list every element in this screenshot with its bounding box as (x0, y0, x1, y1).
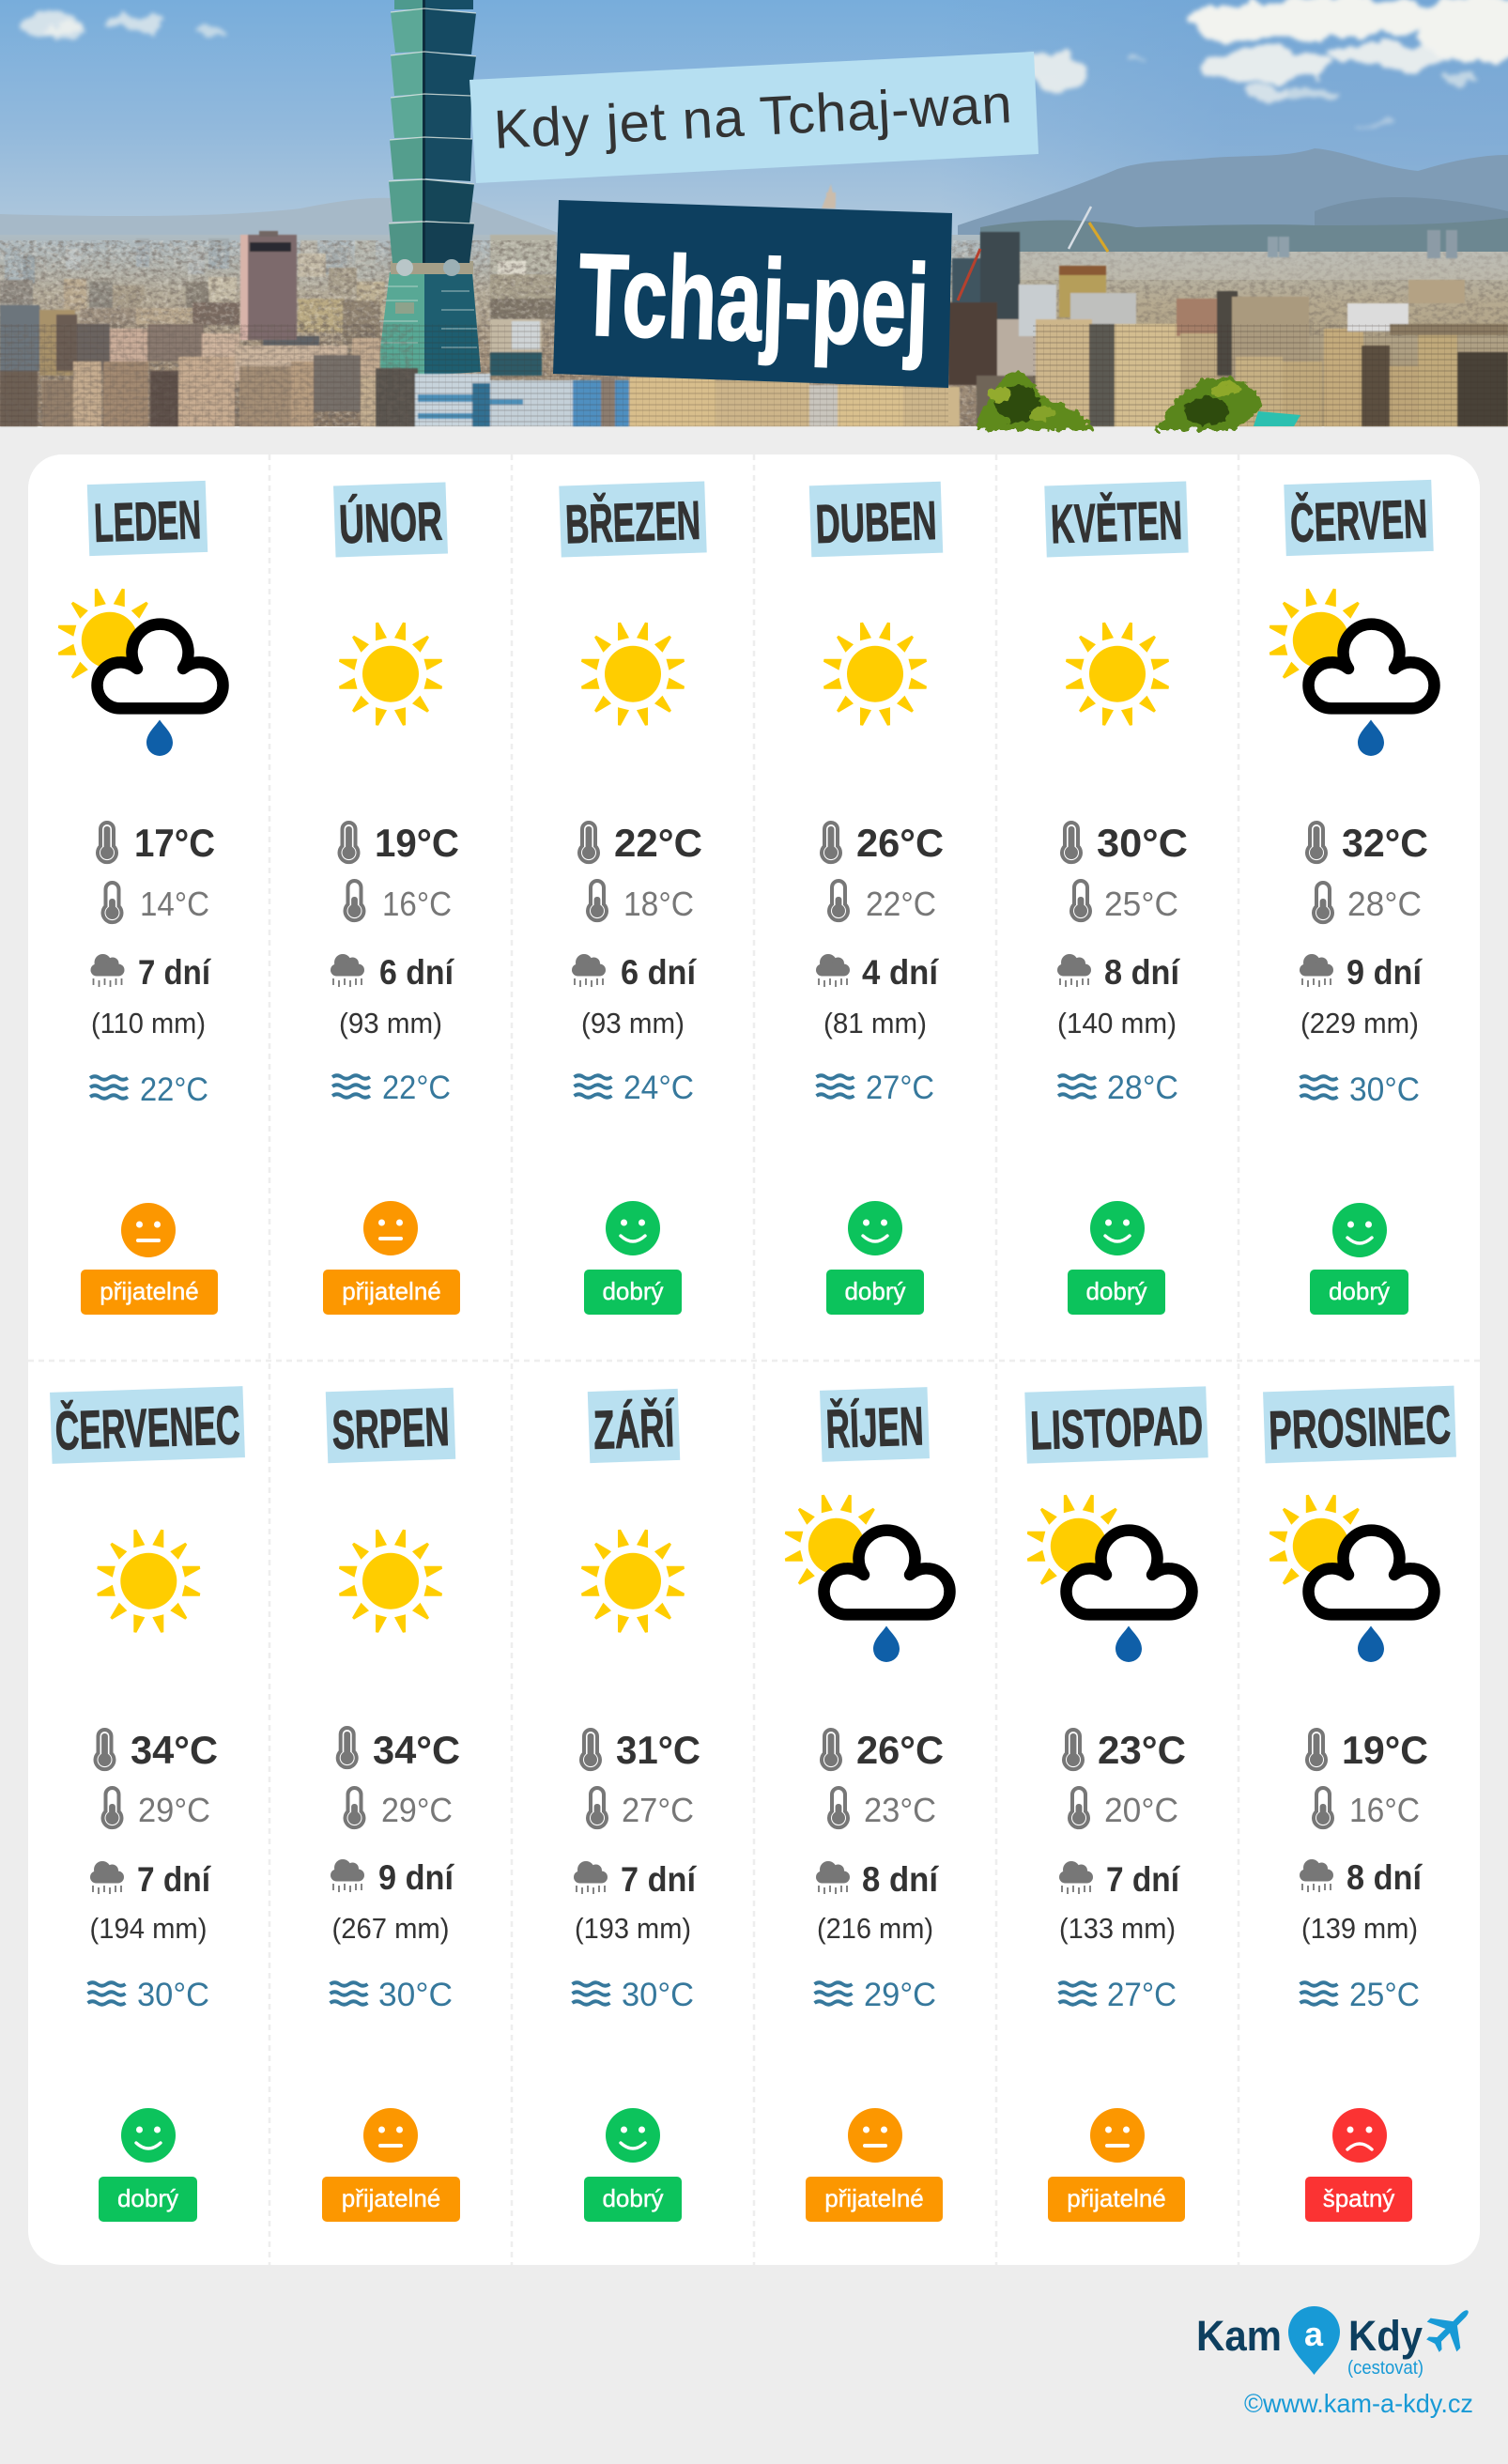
month label (1024, 1386, 1208, 1464)
rainfall: (93 mm) (581, 1007, 685, 1040)
min temperature: 23°C (864, 1791, 936, 1829)
icon: rain (816, 1861, 850, 1894)
panel: duben (809, 482, 944, 1315)
logo: Kam a Kdy (1196, 2296, 1483, 2379)
panel: srpen (322, 1388, 460, 2222)
icon: max temperature (1062, 823, 1081, 862)
icon: rain (90, 954, 124, 987)
icon: min temperature (1314, 883, 1332, 922)
icon: sea (815, 1982, 853, 2005)
icon: rain (90, 1861, 124, 1894)
rainy days: 7 dní (137, 1860, 212, 1899)
month label (588, 1389, 680, 1463)
icon: min temperature (346, 1788, 364, 1827)
white card (28, 454, 1480, 2265)
sea temperature: 30°C (137, 1977, 209, 2013)
icon: rain (816, 954, 850, 987)
subtitle tag (469, 52, 1039, 183)
icon: rating face (1090, 2108, 1145, 2163)
rainfall: (193 mm) (575, 1912, 691, 1945)
icon: min temperature (103, 1788, 122, 1827)
panel: leden (58, 481, 223, 1315)
panel: listopad (1024, 1386, 1208, 2222)
sea temperature: 25°C (1349, 1977, 1420, 2013)
month label (809, 482, 943, 557)
icon: max temperature (340, 823, 359, 862)
icon: max temperature (581, 1730, 600, 1769)
max temperature: 32°C (1342, 821, 1428, 865)
month label: ZÁŘÍ (592, 1397, 676, 1461)
max temperature: 19°C (375, 821, 459, 865)
weather icon: sun (97, 1530, 200, 1633)
max temperature: 19°C (1342, 1728, 1428, 1772)
rainy days: 8 dní (862, 1860, 940, 1899)
icon: max temperature (1307, 1730, 1326, 1769)
rating badge: přijatelné (342, 2184, 440, 2212)
rating badge (323, 1270, 460, 1315)
weather icon: sun and rain (58, 589, 223, 756)
rainy days: 9 dní (1346, 953, 1423, 992)
rainy days: 8 dní (1104, 953, 1181, 992)
rating badge: přijatelné (824, 2184, 924, 2212)
sea temperature: 22°C (140, 1071, 208, 1108)
sea temperature: 30°C (378, 1977, 453, 2013)
panel: květen (1044, 482, 1189, 1315)
icon: rain (1300, 1859, 1333, 1892)
icon: sea (1059, 1982, 1097, 2005)
rating badge: dobrý (1085, 1277, 1147, 1305)
subtitle tag: Kdy jet na Tchaj-wan (492, 73, 1013, 161)
rating badge (1068, 1270, 1165, 1315)
max temperature: 17°C (134, 821, 215, 865)
rainfall: (229 mm) (1300, 1007, 1419, 1040)
rating badge (81, 1270, 218, 1315)
icon: rating face (1090, 1201, 1145, 1255)
month label: LEDEN (93, 489, 202, 554)
sub-element: city texture (0, 240, 980, 426)
icon: min temperature (1069, 1788, 1088, 1827)
icon: sea (1300, 1076, 1337, 1099)
icon: sea (331, 1982, 368, 2005)
panel: říjen (785, 1387, 950, 2222)
min temperature: 16°C (382, 885, 452, 923)
icon: max temperature (579, 823, 598, 862)
weather icon: sun (581, 1530, 685, 1633)
min temperature: 20°C (1104, 1791, 1178, 1829)
rating badge: dobrý (844, 1277, 906, 1305)
sea temperature: 30°C (1349, 1071, 1420, 1108)
weather icon: sun (1066, 623, 1169, 726)
month label: ÚNOR (338, 491, 443, 555)
icon: airplane (1418, 2296, 1483, 2361)
min temperature: 29°C (138, 1791, 210, 1829)
icon: max temperature (98, 823, 116, 862)
panel: prosinec (1263, 1386, 1456, 2222)
weather icon: sun and rain (785, 1495, 950, 1662)
rating badge: přijatelné (1067, 2184, 1166, 2212)
icon: rating face (1332, 2108, 1387, 2163)
weather icon: sun and rain (1027, 1495, 1193, 1662)
month label (326, 1388, 455, 1463)
month label (50, 1386, 245, 1464)
sea temperature: 24°C (623, 1070, 694, 1106)
icon: min temperature (346, 881, 364, 920)
copyright website: ©www.kam-a-kdy.cz (1244, 2389, 1473, 2418)
panel: červen (1269, 480, 1435, 1315)
rating badge (806, 2177, 943, 2222)
sea temperature: 27°C (1107, 1977, 1177, 2013)
icon: min temperature (1071, 881, 1090, 920)
rating badge (99, 2177, 197, 2222)
rainy days: 7 dní (1106, 1860, 1181, 1899)
min temperature: 28°C (1347, 885, 1422, 923)
rainy days: 9 dní (378, 1858, 455, 1897)
month label (1284, 480, 1434, 556)
rainy days: 7 dní (621, 1860, 698, 1899)
month label: BŘEZEN (564, 490, 701, 555)
icon: rain (574, 1861, 608, 1894)
rainfall: (267 mm) (332, 1912, 449, 1945)
icon: rain (1059, 1861, 1093, 1894)
min temperature: 25°C (1104, 885, 1178, 923)
max temperature: 30°C (1097, 821, 1188, 865)
icon: rating face (121, 1203, 176, 1257)
icon: min temperature (829, 881, 848, 920)
icon: rating face (606, 1201, 660, 1255)
rating badge: dobrý (1329, 1277, 1390, 1305)
rating badge (826, 1270, 924, 1315)
icon: min temperature (588, 1788, 607, 1827)
icon: rating face (121, 2108, 176, 2163)
month label: LISTOPAD (1029, 1394, 1204, 1462)
min temperature: 14°C (140, 885, 209, 923)
rainfall: (216 mm) (817, 1912, 933, 1945)
month label: DUBEN (815, 490, 938, 555)
rating badge: špatný (1323, 2184, 1394, 2212)
month label: KVĚTEN (1050, 490, 1183, 555)
weather icon: sun (339, 623, 442, 726)
weather icon: sun (823, 623, 927, 726)
max temperature: 34°C (131, 1728, 218, 1772)
month label: ČERVENEC (54, 1394, 241, 1462)
rating badge (584, 1270, 682, 1315)
title tag (553, 200, 952, 388)
min temperature: 27°C (622, 1791, 694, 1829)
icon: min temperature (103, 883, 122, 922)
panel: září (573, 1389, 700, 2222)
icon: max temperature (1064, 1730, 1083, 1769)
icon: sea (817, 1075, 854, 1098)
rainfall: (139 mm) (1301, 1912, 1418, 1945)
sea temperature: 27°C (866, 1070, 934, 1106)
icon: rating face (363, 1201, 418, 1255)
sea temperature: 28°C (1107, 1070, 1178, 1106)
sub-element: Taipei 101 tower (377, 0, 481, 376)
sea temperature: 22°C (382, 1070, 451, 1106)
sub-element: distant buildings (0, 235, 556, 343)
panel: červenec (50, 1386, 245, 2222)
sea temperature: 30°C (622, 1977, 694, 2013)
icon: max temperature (822, 823, 840, 862)
month label (820, 1387, 930, 1462)
sub-element: foreground buildings (0, 184, 1508, 426)
rating badge (1305, 2177, 1412, 2222)
min temperature: 16°C (1349, 1791, 1420, 1829)
weather icon: sun (339, 1530, 442, 1633)
month label: SRPEN (331, 1396, 451, 1461)
rainy days: 8 dní (1346, 1858, 1423, 1897)
month label (87, 481, 208, 556)
logo: Kam a Kdy: Kam (1196, 2312, 1282, 2360)
rainfall: (140 mm) (1057, 1007, 1177, 1040)
rainfall: (81 mm) (823, 1007, 927, 1040)
icon: rain (331, 954, 364, 987)
hero photo: Taipei skyline (0, 0, 1508, 430)
sea temperature: 29°C (864, 1977, 936, 2013)
icon: rating face (848, 1201, 902, 1255)
month label: ŘÍJEN (825, 1395, 925, 1460)
rainfall: (194 mm) (90, 1912, 207, 1945)
icon: sea (1300, 1982, 1337, 2005)
panel: únor (323, 483, 460, 1315)
icon: min temperature (829, 1788, 848, 1827)
icon: rain (1057, 954, 1091, 987)
icon: rain (331, 1859, 364, 1892)
icon: max temperature (96, 1730, 115, 1769)
month label (333, 483, 448, 557)
rainy days: 7 dní (138, 953, 212, 992)
icon: max temperature (1307, 823, 1326, 862)
panel: březen (559, 481, 707, 1315)
icon: sea (90, 1076, 128, 1099)
rainfall: (110 mm) (91, 1007, 206, 1040)
max temperature: 22°C (614, 821, 702, 865)
rainy days: 4 dní (862, 953, 940, 992)
rating badge (322, 2177, 460, 2222)
max temperature: 26°C (856, 1728, 944, 1772)
max temperature: 26°C (856, 821, 944, 865)
month label (559, 481, 707, 558)
max temperature: 31°C (616, 1728, 700, 1772)
icon: map pin (1288, 2306, 1340, 2375)
max temperature: 23°C (1098, 1728, 1186, 1772)
max temperature: 34°C (373, 1728, 460, 1772)
icon: rating face (363, 2108, 418, 2163)
rating badge: přijatelné (100, 1277, 199, 1305)
icon: sea (575, 1075, 612, 1098)
weather icon: sun and rain (1269, 589, 1435, 756)
rating badge: přijatelné (342, 1277, 441, 1305)
icon: sea (1058, 1075, 1096, 1098)
icon: sea (332, 1075, 370, 1098)
rating badge: dobrý (117, 2184, 178, 2212)
rainfall: (133 mm) (1059, 1912, 1176, 1945)
min temperature: 22°C (866, 885, 936, 923)
icon: rain (572, 954, 606, 987)
rating badge (1048, 2177, 1185, 2222)
rainy days: 6 dní (621, 953, 698, 992)
rating badge: dobrý (602, 1277, 664, 1305)
title tag: Tchaj-pej (577, 230, 931, 371)
icon: rating face (848, 2108, 902, 2163)
min temperature: 18°C (623, 885, 694, 923)
icon: min temperature (1314, 1788, 1332, 1827)
logo: Kam a Kdy: (cestovat) (1347, 2358, 1423, 2379)
logo: Kam a Kdy: Kdy (1348, 2312, 1423, 2360)
rating badge: dobrý (602, 2184, 664, 2212)
icon: sea (573, 1982, 610, 2005)
icon: rain (1300, 954, 1333, 987)
month label (1044, 482, 1189, 557)
icon: min temperature (588, 881, 607, 920)
weather icon: sun and rain (1269, 1495, 1435, 1662)
icon: max temperature (338, 1728, 357, 1767)
rainfall: (93 mm) (339, 1007, 442, 1040)
icon: map pin: a (1304, 2315, 1324, 2353)
rating badge (584, 2177, 682, 2222)
icon: rating face (606, 2108, 660, 2163)
min temperature: 29°C (381, 1791, 453, 1829)
rating badge (1310, 1270, 1408, 1315)
icon: sea (88, 1982, 126, 2005)
rainy days: 6 dní (379, 953, 455, 992)
icon: max temperature (822, 1730, 840, 1769)
sub-element: trees (977, 370, 1263, 430)
icon: rating face (1332, 1203, 1387, 1257)
weather icon: sun (581, 623, 685, 726)
